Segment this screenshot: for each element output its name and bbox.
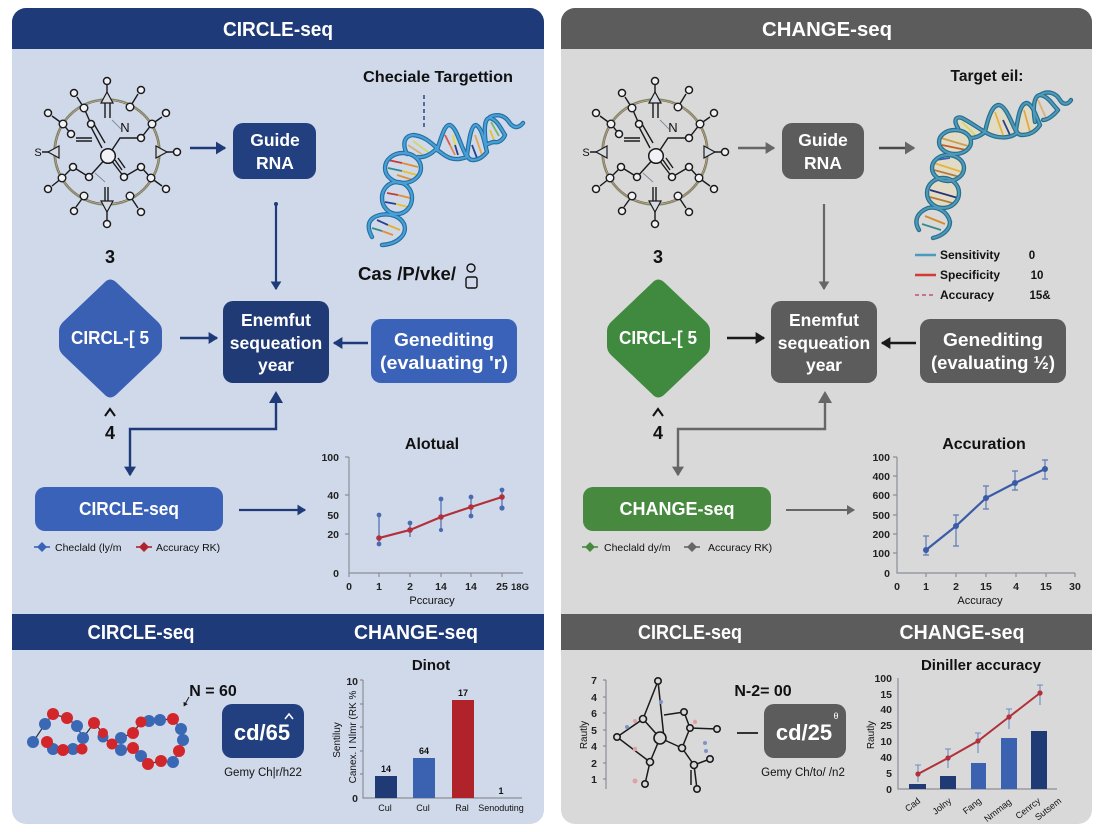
box: Genediting: (evaluating 'r) <box>380 353 508 373</box>
chart title: Diniller accuracy <box>921 657 1042 674</box>
dash before box <box>737 732 758 734</box>
box: center <box>223 301 329 383</box>
box: Guide RNA <box>782 123 864 179</box>
combo chart: Diniller accuracy: Sutsem <box>1033 796 1063 822</box>
chart title: Alotual <box>405 436 459 453</box>
legend: metrics: 0 <box>1029 250 1035 262</box>
box: CIRCLE-seq <box>35 487 223 531</box>
line chart: Accuration: 30 <box>1069 581 1081 593</box>
arrow: diamond to center <box>727 337 764 339</box>
box: center: sequeation <box>778 333 870 353</box>
line chart: Accuration: 100 <box>872 548 890 560</box>
line chart: Alotual: 0 <box>346 581 352 593</box>
section bar: CIRCLE-seq <box>638 622 742 644</box>
combo chart: Diniller accuracy: 5 <box>886 768 892 780</box>
bar chart: Dinot: 14 <box>381 764 391 774</box>
bar chart: Dinot: 17 <box>458 688 468 698</box>
section bar: CIRCLE-seq <box>88 622 194 644</box>
dashed pointer line <box>423 95 425 127</box>
number 3: 3 <box>653 247 663 267</box>
line chart: Accuration: 15 <box>980 581 992 593</box>
line chart: Accuration: 2 <box>953 581 959 593</box>
line chart: Accuration: 0 <box>884 568 890 580</box>
label: Cas: Cas /P/vke/ <box>358 264 456 284</box>
number 4 with caret <box>653 409 663 443</box>
molecule scatter: 1 <box>591 774 597 786</box>
section bar <box>12 614 544 650</box>
diamond: CIRCL <box>59 280 162 398</box>
line chart: Accuration: 1 <box>923 581 929 593</box>
combo chart: Diniller accuracy: Rautly <box>866 721 877 749</box>
legend: metrics: Specificity <box>940 268 1000 282</box>
molecule scatter: 4 <box>591 692 597 704</box>
label: Cas <box>358 264 477 288</box>
legend: Checlald (ly/m <box>55 542 122 554</box>
molecule scatter: 2 <box>591 758 597 770</box>
label: N = 60: N = 60 <box>189 683 237 700</box>
line chart: Alotual: 40 <box>327 490 339 502</box>
line chart: Alotual: 18G <box>511 582 529 593</box>
combo chart: Diniller accuracy: 25 <box>880 720 892 732</box>
number 4 with caret: 4 <box>653 423 663 443</box>
box: Genediting <box>371 319 517 383</box>
chart title: Dinot <box>412 657 450 674</box>
arrow: molecule to guide RNA <box>738 147 774 149</box>
arrowhead up <box>269 391 283 403</box>
molecule scatter: 6 <box>591 708 597 720</box>
x axis title: Accuracy <box>957 595 1003 607</box>
bar chart: Dinot: Sentiluy <box>332 722 343 758</box>
bar chart: Dinot <box>332 657 524 813</box>
icon: circular molecule <box>582 78 728 228</box>
box: Guide RNA: Guide <box>798 130 848 150</box>
line chart: Alotual <box>321 436 529 607</box>
line chart: Alotual: 100 <box>321 452 339 464</box>
combo chart: Diniller accuracy: 40 <box>880 752 892 764</box>
combo chart: Diniller accuracy <box>866 657 1063 824</box>
number 3: 3 <box>105 247 115 267</box>
bar chart: Dinot: Senoduting <box>478 803 524 813</box>
box: Guide RNA: RNA <box>256 153 294 173</box>
arrow: box to chart <box>786 509 854 511</box>
panel: CHANGE-seq <box>561 8 1092 824</box>
icon: DNA helix <box>369 115 523 245</box>
box: Genediting: (evaluating ½) <box>931 353 1055 373</box>
combo chart: Diniller accuracy: 15 <box>880 689 892 701</box>
line chart: Alotual: 50 <box>327 510 339 522</box>
box: center: sequeation <box>230 333 322 353</box>
line chart: Accuration <box>872 436 1081 607</box>
box: Genediting <box>920 319 1066 383</box>
legend <box>582 542 772 554</box>
box: CIRCLE-seq: CIRCLE-seq <box>79 499 179 519</box>
arrow: genediting to center <box>334 342 368 344</box>
bar chart: Dinot: Cul <box>416 803 430 813</box>
icon: bead chain <box>27 708 189 770</box>
molecule scatter <box>579 675 720 792</box>
combo chart: Diniller accuracy: Nmmag <box>982 797 1013 824</box>
box: Genediting: Genediting <box>394 330 494 350</box>
line chart: Alotual: 2 <box>407 581 413 593</box>
section bar: CHANGE-seq <box>354 622 478 644</box>
box: center: Enemfut <box>789 310 859 330</box>
title: CIRCLE-seq: CIRCLE-seq <box>223 19 333 41</box>
box: center: year <box>806 355 842 375</box>
arrow: diamond to center <box>180 337 217 339</box>
section bar: CHANGE-seq <box>900 622 1024 644</box>
bar chart: Dinot: 64 <box>419 746 429 756</box>
box: Guide RNA: RNA <box>804 153 842 173</box>
line chart: Accuration: 100 <box>872 452 890 464</box>
box: center: Enemfut <box>241 310 311 330</box>
diamond: CIRCL: CIRCL-[ 5 <box>619 328 697 348</box>
line chart: Alotual: 0 <box>333 568 339 580</box>
x axis title: Pccuracy <box>409 595 455 607</box>
arrow: guide RNA to helix <box>879 147 914 149</box>
box: cd/25: θ <box>833 711 839 721</box>
combo chart: Diniller accuracy: Cad <box>903 796 922 814</box>
box: Guide RNA: Guide <box>250 130 300 150</box>
box: CHANGE-seq <box>583 487 771 531</box>
line chart: Alotual: 1 <box>376 581 382 593</box>
legend: metrics: Sensitivity <box>940 248 1000 262</box>
combo chart: Diniller accuracy: Jolny <box>931 795 954 817</box>
line chart: Accuration: 4 <box>1013 581 1019 593</box>
legend: metrics <box>915 248 1051 302</box>
label: N-2= 00: N-2= 00 <box>734 683 792 700</box>
header bar: CIRCLE-seq <box>12 8 544 49</box>
combo chart: Diniller accuracy: 0 <box>886 784 892 796</box>
bar chart: Dinot: 10 <box>346 676 358 688</box>
line chart: Accuration: 600 <box>872 490 890 502</box>
section bar <box>561 614 1092 650</box>
diamond: CIRCL <box>607 280 710 398</box>
title: CHANGE-seq: CHANGE-seq <box>762 19 892 41</box>
bar chart: Dinot: Canex. I Nlmr (RK % <box>348 690 359 783</box>
header bar: CHANGE-seq <box>561 8 1092 49</box>
combo chart: Diniller accuracy: 100 <box>874 673 892 685</box>
chart title: Accuration <box>942 436 1026 453</box>
legend: metrics: 10 <box>1031 270 1043 282</box>
icon: circular molecule <box>34 78 180 228</box>
line chart: Alotual: 14 <box>465 581 477 593</box>
connector arrow <box>678 393 825 475</box>
label: Checiale Targettion: Checiale Targettion <box>363 69 513 86</box>
molecule scatter: Rautly <box>579 721 590 749</box>
line chart: Alotual: 14 <box>435 581 447 593</box>
line chart: Accuration: 0 <box>894 581 900 593</box>
box: cd/65: cd/65 <box>234 720 290 745</box>
label: N = 60 <box>184 683 237 706</box>
bar chart: Dinot: 0 <box>352 793 358 805</box>
line chart: Accuration: 500 <box>872 510 890 522</box>
caption: Gemy: Gemy Ch|r/h22 <box>224 767 302 779</box>
combo chart: Diniller accuracy: Fang <box>961 796 983 816</box>
arrow: guide RNA down to center <box>274 202 278 289</box>
line chart: Accuration: 200 <box>872 529 890 541</box>
arrowhead up <box>818 391 832 403</box>
box: cd/65 <box>222 704 304 758</box>
bar chart: Dinot: Cul <box>378 803 392 813</box>
legend <box>34 542 220 554</box>
legend: metrics: Accuracy <box>940 288 994 302</box>
legend: Accuracy RK) <box>708 542 772 554</box>
bar chart: Dinot: 1 <box>498 786 504 796</box>
number 4 with caret <box>105 409 115 443</box>
number 4 with caret: 4 <box>105 423 115 443</box>
molecule scatter: 5 <box>591 725 597 737</box>
bar chart: Dinot: Ral <box>455 803 469 813</box>
caption: Gemy: Gemy Ch/to/ /n2 <box>761 767 845 779</box>
icon: DNA helix <box>916 93 1071 238</box>
box: Genediting: Genediting <box>943 330 1043 350</box>
label: Target eil: Target eil: <box>951 68 1023 85</box>
box: Guide RNA <box>233 123 316 179</box>
line chart: Alotual: 25 <box>496 581 508 593</box>
legend: metrics: 15& <box>1029 290 1051 302</box>
molecule scatter: 7 <box>591 675 597 687</box>
box: center <box>771 301 877 383</box>
diamond: CIRCL: CIRCL-[ 5 <box>71 328 149 348</box>
connector arrow <box>130 393 276 475</box>
arrow: box to chart <box>239 509 305 511</box>
arrow: genediting to center <box>882 342 916 344</box>
molecule scatter: 4 <box>591 741 597 753</box>
box: cd/25 <box>764 704 846 758</box>
arrow: molecule to guide RNA <box>190 147 225 149</box>
line chart: Alotual: 20 <box>327 529 339 541</box>
box: CHANGE-seq: CHANGE-seq <box>619 499 735 519</box>
combo chart: Diniller accuracy: Cenrcy <box>1014 795 1043 821</box>
box: center: year <box>258 355 294 375</box>
legend: Accuracy RK) <box>156 542 220 554</box>
combo chart: Diniller accuracy: 40 <box>880 704 892 716</box>
arrow: guide RNA down to center <box>823 204 825 289</box>
combo chart: Diniller accuracy: 10 <box>880 736 892 748</box>
box: cd/25: cd/25 <box>776 720 832 745</box>
panel: CIRCLE-seq <box>12 8 544 824</box>
line chart: Accuration: 400 <box>872 471 890 483</box>
line chart: Accuration: 15 <box>1040 581 1052 593</box>
legend: Checlald dy/m <box>604 542 671 554</box>
